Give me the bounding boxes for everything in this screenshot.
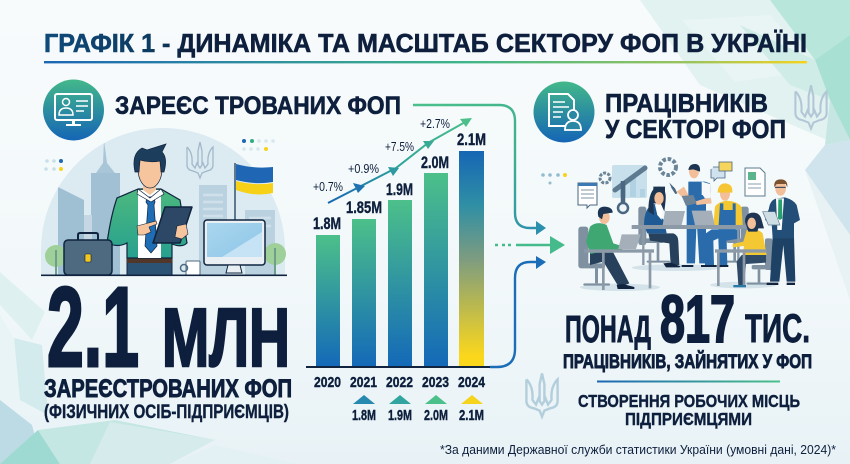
bar chart: registered FOPs by year: 2023 (422, 374, 449, 391)
bar chart: registered FOPs by year: 1.9M (386, 180, 413, 199)
bar chart: registered FOPs by year: 2022 (386, 374, 413, 391)
heading: workers: ПРАЦІВНИКІВ (605, 88, 768, 118)
decorative state emblem (187, 142, 213, 178)
growth trend arrow with percentages: +0.7% (313, 179, 343, 194)
big number: over 817 thousand (565, 282, 810, 357)
bar chart: registered FOPs by year: 2.0M (424, 407, 448, 424)
decorative dots (44, 139, 567, 184)
big number 2.1 млн: 2.1 (47, 264, 139, 390)
registered text: ЗАРЕЄСТРОВАНИХ ФОП (44, 375, 292, 403)
big number: over 817 thousand: ПОНАД (565, 309, 651, 351)
big number 2.1 млн: МЛН (162, 291, 290, 384)
icon: registered entrepreneur monitor (43, 80, 104, 140)
bar chart: registered FOPs by year: 2020 (314, 374, 341, 391)
heading: workers (605, 88, 786, 144)
registered text (44, 375, 292, 423)
growth trend arrow with percentages: +7.5% (385, 139, 414, 154)
bar chart: registered FOPs by year: 1.8M (352, 407, 376, 424)
big number 2.1 млн (47, 264, 290, 390)
bar chart: registered FOPs by year: 2021 (350, 374, 377, 391)
illustration: entrepreneur at desk (41, 128, 287, 276)
job creation text: ПІДПРИЄМЦЯМИ (625, 409, 752, 429)
title: ГРАФІК 1 - ДИНАМІКА ТА МАСШТАБ СЕКТОРУ ФОП В УКРАЇНІ (44, 28, 807, 58)
divider (597, 380, 780, 382)
flow arrow: blue from axis (490, 256, 546, 367)
footnote: *За даними Державної служби статистики України (умовні дані, 2024)* (440, 443, 836, 457)
big number: over 817 thousand: 817 (660, 282, 735, 357)
job creation text (578, 391, 800, 429)
bar chart: registered FOPs by year: 1.8M (313, 214, 341, 233)
job creation text: СТВОРЕННЯ РОБОЧИХ МІСЦЬ (578, 391, 800, 411)
bar chart: registered FOPs by year: 2024 (458, 374, 486, 391)
growth trend arrow with percentages: +0.9% (348, 161, 379, 176)
bar chart: registered FOPs by year: 1.85M (346, 198, 382, 217)
bar chart: registered FOPs by year (306, 130, 491, 424)
bar chart: registered FOPs by year: 2.1M (459, 407, 484, 424)
big number: over 817 thousand: ТИС. (745, 307, 810, 351)
decorative state emblem bottom (526, 373, 558, 417)
title underline (44, 61, 807, 63)
heading: registered: ЗАРЕЄС ТРОВАНИХ ФОП (115, 92, 401, 120)
flow arrow: green to workers (413, 105, 546, 235)
growth trend arrow with percentages: +2.7% (420, 116, 450, 131)
bar chart: registered FOPs by year: 1.9M (388, 407, 412, 424)
growth trend arrow with percentages (313, 116, 472, 203)
bar chart: registered FOPs by year: 2.0M (421, 153, 449, 172)
decorative state emblem right (795, 85, 827, 129)
registered text: (ФІЗИЧНИХ ОСІБ-ПІДПРИЄМЦІВ) (44, 402, 289, 423)
flow arrow: dashed middle (495, 236, 565, 254)
icon: workers document (534, 82, 594, 142)
heading: workers: У СЕКТОРІ ФОП (605, 114, 786, 144)
bar chart: registered FOPs by year: 2.1M (457, 130, 486, 149)
illustration: team of workers (578, 159, 800, 291)
